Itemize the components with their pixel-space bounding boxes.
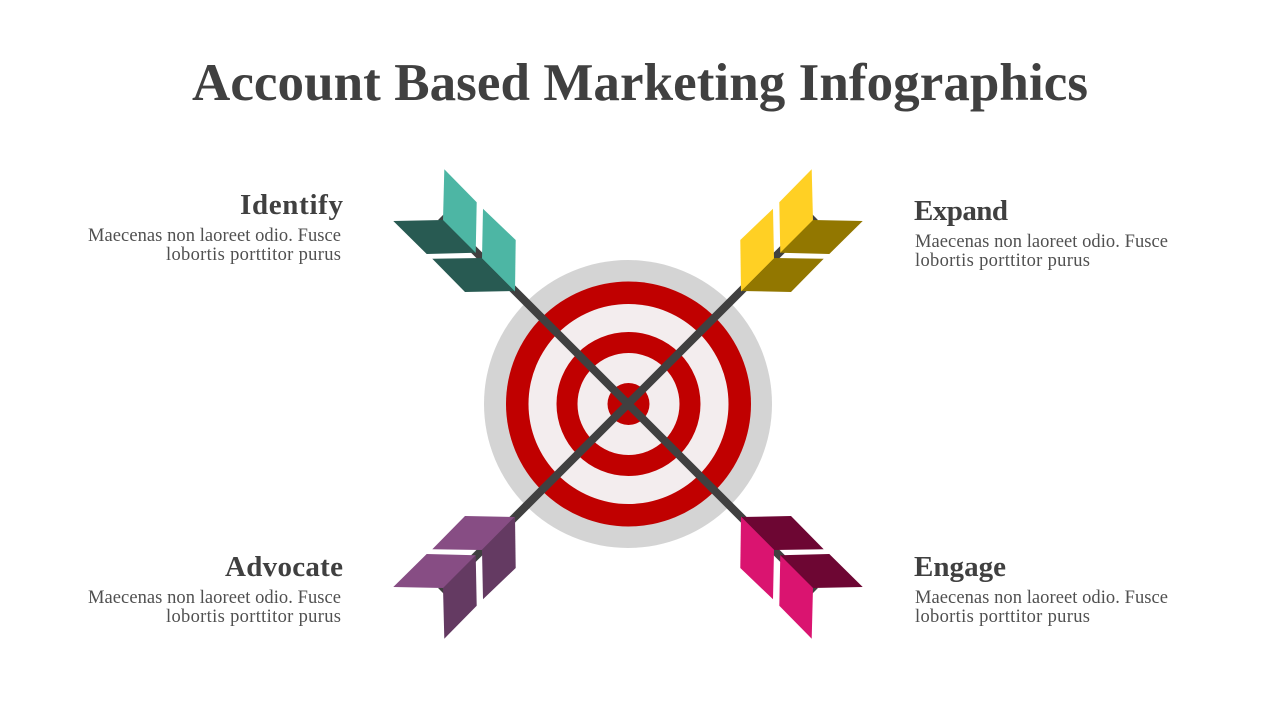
body: Engage: lobortis porttitor purus <box>915 607 1090 627</box>
arrow: teal, top left <box>393 169 628 404</box>
body: Engage: Maecenas non laoreet odio. Fusce <box>915 588 1168 608</box>
body: Identify: lobortis porttitor purus <box>166 245 341 265</box>
body: Expand: lobortis porttitor purus <box>915 251 1090 271</box>
body: Expand <box>915 232 1168 271</box>
heading: Advocate: Advocate <box>225 551 343 583</box>
body: Identify: Maecenas non laoreet odio. Fusce <box>88 226 341 246</box>
heading: Engage: Engage <box>914 551 1006 583</box>
heading: Identify: Identify <box>240 189 344 221</box>
target board <box>484 260 772 548</box>
body: Advocate <box>88 588 341 627</box>
text block: Expand <box>914 195 1168 271</box>
text block: Advocate <box>88 551 343 627</box>
text block: Engage <box>914 551 1168 627</box>
body: Engage <box>915 588 1168 627</box>
text block: Identify <box>88 189 344 265</box>
arrow: magenta, bottom right <box>628 404 863 639</box>
arrow: purple, bottom left <box>393 404 628 639</box>
body: Expand: Maecenas non laoreet odio. Fusce <box>915 232 1168 252</box>
body: Identify <box>88 226 341 265</box>
body: Advocate: lobortis porttitor purus <box>166 607 341 627</box>
heading: Expand: Expand <box>914 195 1008 227</box>
title: Account Based Marketing Infographics <box>192 54 1088 112</box>
arrow: yellow, top right <box>628 169 863 404</box>
body: Advocate: Maecenas non laoreet odio. Fusce <box>88 588 341 608</box>
